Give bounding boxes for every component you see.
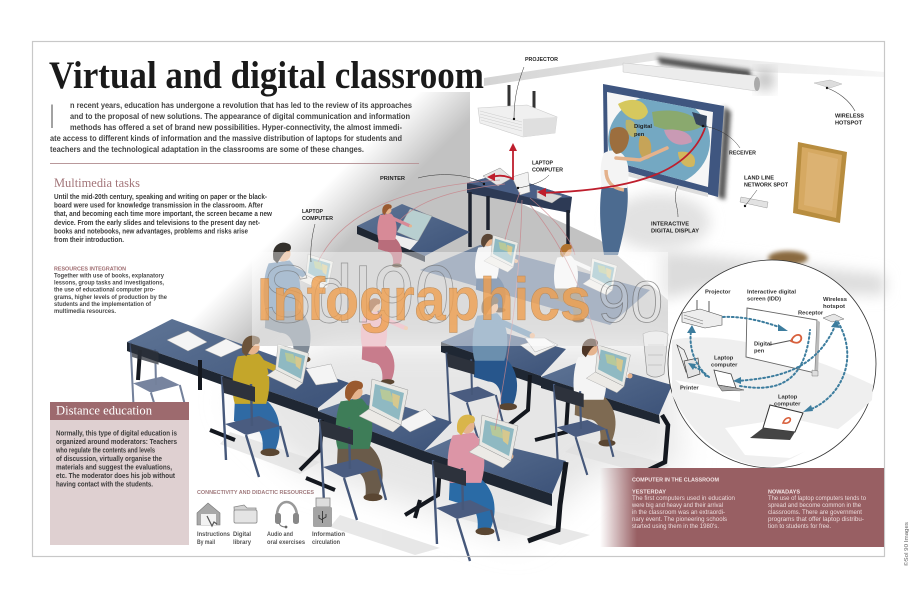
wireless connection arcs	[318, 180, 600, 430]
label: wireless hotspot: HOTSPOT	[835, 120, 862, 126]
floor shadows	[220, 432, 670, 555]
inset labels: computer	[711, 362, 738, 368]
yesterday column: were big and heavy and their arrival	[631, 503, 723, 509]
intro text: and to the proposal of new solutions. The appearance of digital communication and information	[70, 112, 410, 121]
back row desks and students	[357, 204, 650, 325]
interactive digital display	[603, 84, 731, 200]
multimedia text	[54, 194, 272, 244]
papers on desk	[167, 331, 555, 432]
student in green	[320, 379, 408, 520]
inset hotspot	[823, 314, 844, 322]
distance education text: organized around moderators: Teachers	[56, 439, 177, 446]
multimedia text: Until the mid-20th century, speaking and writing on paper or the black-	[54, 194, 268, 201]
label: laptop computer at table: LAPTOP	[532, 160, 553, 166]
printer table	[467, 168, 572, 253]
label: wireless hotspot	[835, 114, 864, 126]
resources integration: students and the implementation of	[54, 302, 152, 308]
inset laptop two	[750, 405, 803, 440]
multimedia text: that, and becoming each time more important, the screen became a new	[54, 211, 272, 218]
label: interactive digital display	[651, 186, 699, 234]
inset labels: computer	[774, 402, 801, 408]
distance education text: having contact with the students.	[56, 482, 153, 488]
nowadays column: programs that offer laptop distribu-	[768, 517, 864, 523]
resources integration: RESOURCES INTEGRATION	[54, 266, 126, 272]
inset arrowheads	[687, 320, 840, 412]
resources integration: grams, higher levels of production by the	[54, 295, 168, 301]
label: receiver: RECEIVER	[729, 150, 757, 156]
icon: headset	[275, 502, 299, 528]
inset labels: Receptor	[798, 310, 824, 316]
title: Virtual and digital classroom	[49, 54, 484, 97]
classroom illustration	[127, 52, 885, 561]
label: interactive digital display: DIGITAL DISPLAY	[651, 228, 699, 234]
intro text: ate access to different kinds of information and the massive distribution of laptops for students and	[50, 134, 402, 143]
inset labels: Digital	[754, 342, 772, 348]
nowadays column	[768, 490, 867, 530]
world map globe	[608, 98, 710, 180]
student in yellow	[222, 336, 309, 477]
yesterday column: The first computers used in education	[632, 496, 735, 502]
distance education text: materials and suggest the evaluations,	[56, 464, 172, 472]
icon: usb drive	[313, 498, 332, 527]
multimedia text: books and notebooks, new advantages, problems and risks arise	[54, 228, 248, 235]
icon captions: Digital	[233, 532, 251, 538]
resources integration: multimedia resources.	[54, 309, 116, 315]
label: land line network spot: LAND LINE	[744, 176, 774, 182]
icon captions: oral exercises	[267, 540, 306, 546]
student in pink	[433, 415, 518, 561]
watermark orange text: Infographics	[257, 266, 591, 333]
red data arrows	[487, 128, 705, 197]
label: laptop computer left: LAPTOP	[302, 209, 323, 215]
land line network spot	[740, 190, 768, 208]
resources heading: CONNECTIVITY AND DIDACTIC RESOURCES	[197, 490, 314, 496]
resources integration: the use of educational computer pro-	[54, 288, 155, 294]
panel heading: COMPUTER IN THE CLASSROOM	[632, 478, 719, 484]
distance education text: who regulate the contents and levels	[55, 448, 155, 454]
icon captions: Information	[312, 532, 345, 538]
inset labels: Projector	[705, 290, 731, 296]
label: land line network spot: NETWORK SPOT	[744, 182, 788, 188]
label: laptop computer left: COMPUTER	[302, 216, 334, 222]
watermark outline number: 90	[598, 270, 663, 335]
students row two	[264, 243, 632, 475]
nowadays column: The use of laptop computers tends to	[768, 496, 867, 502]
heading: multimedia tasks: Multimedia tasks	[54, 175, 140, 190]
distance education text: etc. The moderator does his job without	[56, 473, 176, 480]
inset screen	[746, 308, 820, 376]
intro text: n recent years, education has undergone a revolution that has led to the review of its approaches	[70, 101, 413, 110]
label: laptop computer left	[302, 209, 334, 262]
teacher	[600, 127, 667, 255]
distance education text: Normally, this type of digital education is	[56, 430, 177, 438]
label: projector: PROJECTOR	[525, 57, 559, 63]
inset background	[768, 251, 808, 265]
yesterday column: in the classroom was an extraordi-	[632, 510, 725, 516]
label: land line network spot	[744, 176, 788, 188]
nowadays column: spread and become common in the	[768, 503, 862, 509]
resources integration: Together with use of books, explanatory	[54, 274, 165, 280]
label: digital pen	[634, 124, 652, 138]
nowadays column: classrooms. There are government	[768, 510, 862, 516]
ceiling beam and projection screen roller	[484, 52, 884, 91]
yesterday column: started using them in the 1980's.	[632, 524, 719, 530]
intro text: teachers and the technological adaptation in the classrooms are some of these changes.	[50, 145, 364, 154]
label: interactive digital display: INTERACTIVE	[651, 222, 689, 228]
nowadays column: NOWADAYS	[768, 490, 800, 496]
resources integration: lessons, group tasks and investigations,	[54, 281, 164, 287]
inset projector	[682, 300, 722, 328]
yesterday column: nary event. The pioneering schools	[632, 517, 727, 523]
room shading	[190, 92, 885, 540]
distance education heading: Distance education	[56, 404, 153, 418]
watermark outline text: SdI90	[262, 249, 456, 340]
empty chair	[130, 342, 187, 428]
inset printer	[677, 345, 700, 378]
intro text: methods has offered a set of brand new possibilities. Hyper-connectivity, the almost immedi-	[70, 123, 402, 132]
icon captions: By mail	[197, 540, 215, 546]
distance education text: of discussion, virtually organise the	[56, 456, 162, 463]
label: digital pen: pen	[634, 132, 645, 138]
panel: distance education	[50, 402, 189, 545]
inset: connection diagram	[668, 251, 876, 468]
projector	[478, 85, 557, 137]
inset labels: pen	[754, 348, 765, 354]
picture frame	[793, 142, 847, 223]
inset dotted connections	[691, 317, 847, 410]
label: wireless hotspot: WIRELESS	[835, 114, 864, 120]
icon captions: Audio and	[267, 532, 293, 538]
inset labels: hotspot	[823, 304, 845, 310]
icon captions: library	[233, 540, 252, 546]
icon captions: Instructions	[197, 532, 231, 538]
row two desks	[441, 326, 672, 476]
nowadays column: tion to students for free.	[768, 524, 831, 530]
inset labels: Wireless	[823, 297, 847, 303]
resources integration	[54, 266, 168, 315]
label: projector	[513, 57, 559, 120]
inset labels: Printer	[680, 386, 699, 392]
label: laptop computer at table	[517, 160, 564, 189]
label: printer: PRINTER	[380, 176, 406, 182]
icon: folder	[234, 505, 257, 523]
intro text	[50, 101, 413, 154]
callout labels and leaders	[302, 57, 864, 262]
label: laptop computer at table: COMPUTER	[532, 168, 564, 174]
inset digital pen	[769, 335, 801, 345]
icon: envelope	[197, 503, 220, 526]
distance education text	[55, 430, 177, 488]
multimedia text: from their introduction.	[54, 237, 124, 244]
multimedia text: device. From the early slides and televisions to the present day net-	[54, 220, 261, 227]
inset labels: Laptop	[778, 394, 798, 400]
icon captions: circulation	[312, 540, 340, 546]
inset labels: Laptop	[714, 356, 734, 362]
wireless hotspot device	[814, 80, 855, 111]
inset labels	[680, 290, 847, 408]
panel: computer in the classroom	[600, 468, 884, 547]
label: receiver	[702, 125, 757, 156]
inset labels: Interactive digital	[747, 290, 796, 296]
yesterday column	[631, 490, 735, 530]
icon captions	[197, 532, 345, 546]
label: digital pen: Digital	[634, 124, 652, 130]
credit: ©Sol 90 Images	[903, 522, 910, 566]
inset labels: screen (IDD)	[747, 296, 781, 302]
panel: connectivity and didactic resources	[197, 490, 345, 546]
text: I	[50, 98, 54, 136]
label: printer	[380, 175, 485, 185]
inset laptop one	[714, 370, 744, 391]
front row desks	[127, 319, 566, 541]
waste bin	[643, 331, 668, 377]
yesterday column: YESTERDAY	[632, 490, 666, 496]
watermark	[252, 249, 668, 346]
multimedia text: board were used for knowledge transmission in the classroom. After	[54, 203, 263, 210]
